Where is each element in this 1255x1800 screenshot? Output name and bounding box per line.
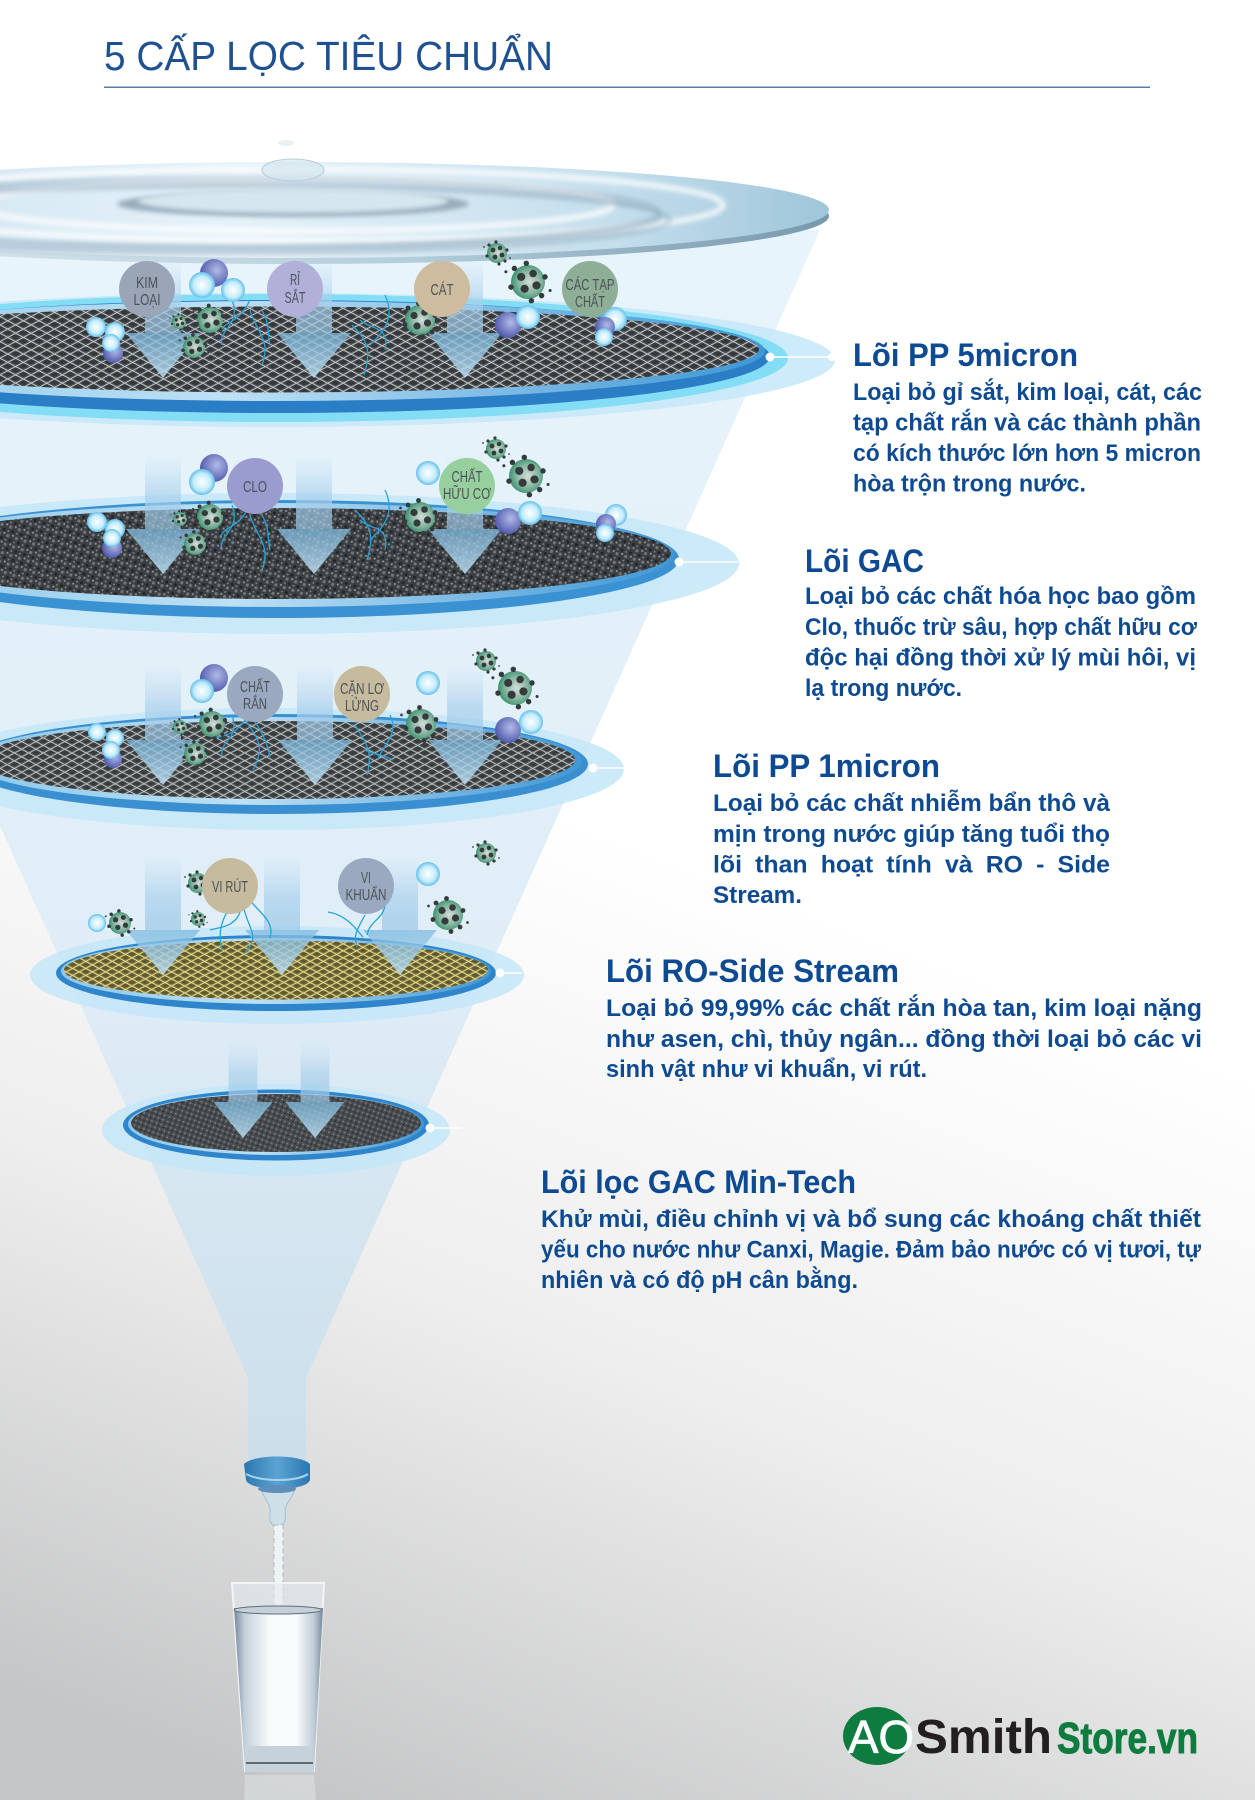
disc 5: GAC Min-Tech	[102, 1044, 462, 1176]
disc 4: RO Side Stream	[30, 840, 524, 1024]
label: Chất rắn	[227, 666, 283, 722]
glass of water	[232, 1583, 324, 1800]
logo: AO Smith Store.vn: AO	[848, 1711, 914, 1763]
text block: Lõi lọc GAC Min-Tech	[541, 1164, 1202, 1294]
text block: Lõi PP 5micron: tạp chất rắn và các thành phần	[853, 408, 1201, 436]
arrows	[126, 261, 502, 378]
text block: Lõi PP 1micron: lõi than hoạt tính và RO - Side	[713, 852, 1110, 878]
label: Clo: CLO	[243, 479, 267, 496]
label: Các tạp chất: CÁC TẠP	[566, 275, 614, 294]
text block: Lõi PP 1micron: Loại bỏ các chất nhiễm bẩn thô và	[713, 789, 1111, 817]
text block: Lõi GAC: Lõi GAC	[805, 543, 924, 579]
label: Rỉ sắt: RỈ	[290, 270, 300, 289]
text block: Lõi RO-Side Stream: sinh vật như vi khuẩn, vi rút.	[606, 1056, 927, 1083]
text block: Lõi RO-Side Stream: Loại bỏ 99,99% các chất rắn hòa tan, kim loại nặng	[606, 994, 1202, 1022]
text block: Lõi GAC: độc hại đồng thời xử lý mùi hôi, vị	[805, 644, 1196, 672]
arrows	[126, 668, 502, 785]
label: Vi rút: VI RÚT	[212, 877, 248, 896]
funnel of light	[0, 230, 820, 1462]
label: Cát	[414, 261, 470, 317]
text block: Lõi PP 1micron: Lõi PP 1micron	[713, 748, 940, 784]
text block: Lõi PP 1micron	[713, 748, 1111, 909]
label: Kim loại: KIM	[136, 275, 158, 292]
logo emblem	[843, 1707, 911, 1765]
disc 2: GAC	[0, 436, 739, 634]
text block: Lõi lọc GAC Min-Tech: nhiên và có độ pH cân bằng.	[541, 1266, 858, 1294]
text block: Lõi GAC	[805, 543, 1198, 702]
arrows	[126, 858, 437, 975]
text block: Lõi PP 1micron: mịn trong nước giúp tăng tuổi thọ	[713, 821, 1110, 848]
label: Kim loại	[119, 261, 175, 317]
label: Clo	[227, 458, 283, 514]
text block: Lõi lọc GAC Min-Tech: Khử mùi, điều chỉnh vị và bổ sung các khoáng chất thiết	[541, 1206, 1201, 1233]
text block: Lõi RO-Side Stream: Lõi RO-Side Stream	[606, 953, 899, 989]
connector dot	[500, 972, 522, 974]
label: Vi khuẩn	[338, 858, 394, 914]
water disc edge	[0, 168, 829, 264]
label: Chất rắn: CHẤT	[240, 677, 270, 696]
logo: AO Smith Store.vn	[843, 1707, 1198, 1765]
contaminants	[87, 436, 627, 570]
text block: Lõi RO-Side Stream: như asen, chì, thủy ngân... đồng thời loại bỏ các vi	[606, 1026, 1202, 1053]
nozzle tip	[260, 1484, 296, 1526]
label: Chất hữu cơ: CHẤT	[452, 467, 483, 486]
text block: Lõi PP 5micron: Lõi PP 5micron	[853, 337, 1078, 373]
disc 1: PP 5 micron	[0, 240, 836, 427]
arrows	[126, 457, 502, 574]
label: Cặn lơ lửng: CẶN LƠ	[340, 679, 384, 698]
label: Vi khuẩn: KHUẨN	[346, 885, 386, 904]
glass reflection	[244, 1775, 316, 1800]
label: Các tạp chất	[562, 261, 618, 317]
connector dot	[679, 561, 738, 563]
text block: Lõi PP 1micron: Stream.	[713, 882, 802, 909]
water drop	[262, 159, 324, 181]
label: Vi rút	[202, 858, 258, 914]
title: 5 CẤP LỌC TIÊU CHUẨN	[104, 32, 553, 79]
connector dot	[593, 767, 624, 769]
arrows	[213, 1044, 345, 1138]
label: Chất hữu cơ	[439, 458, 495, 514]
label: Các tạp chất: CHẤT	[575, 292, 605, 311]
connector dot	[770, 356, 832, 358]
label: Cát: CÁT	[430, 280, 454, 299]
disc 3: PP 1 micron	[0, 648, 624, 830]
water surface	[0, 140, 829, 264]
glass body	[232, 1583, 324, 1771]
text block: Lõi PP 5micron: có kích thước lớn hơn 5 micron	[853, 440, 1201, 467]
text block: Lõi PP 5micron: hòa trộn trong nước.	[853, 470, 1086, 498]
connector dot	[430, 1127, 462, 1129]
text block: Lõi GAC: Clo, thuốc trừ sâu, hợp chất hữu cơ	[805, 614, 1198, 641]
text block: Lõi PP 5micron	[853, 337, 1202, 498]
label: Chất hữu cơ: HỮU CƠ	[443, 483, 491, 503]
nozzle	[244, 1456, 310, 1526]
label: Rỉ sắt: SẮT	[284, 288, 306, 307]
logo text Store.vn: Store.vn	[1057, 1714, 1198, 1763]
contaminants	[88, 648, 543, 775]
text block: Lõi GAC: Loại bỏ các chất hóa học bao gồm	[805, 583, 1196, 610]
label: Rỉ sắt	[267, 261, 323, 317]
label: Cặn lơ lửng: LỬNG	[345, 696, 379, 715]
text block: Lõi RO-Side Stream	[606, 953, 1202, 1083]
text block: Lõi GAC: lạ trong nước.	[805, 675, 962, 702]
logo text Smith: Smith	[915, 1711, 1052, 1764]
label: Cặn lơ lửng	[334, 666, 390, 722]
text block: Lõi lọc GAC Min-Tech: Lõi lọc GAC Min-Tech	[541, 1164, 856, 1200]
label: Kim loại: LOẠI	[134, 292, 160, 309]
label: Vi khuẩn: VI	[361, 870, 371, 887]
text block: Lõi lọc GAC Min-Tech: yếu cho nước như Canxi, Magie. Đảm bảo nước có vị tươi, tự	[541, 1236, 1202, 1264]
contaminants	[88, 840, 500, 953]
label: Chất rắn: RẮN	[243, 694, 267, 713]
contaminants	[86, 240, 627, 375]
text block: Lõi PP 5micron: Loại bỏ gỉ sắt, kim loại, cát, các	[853, 378, 1202, 406]
water stream	[274, 1525, 283, 1613]
